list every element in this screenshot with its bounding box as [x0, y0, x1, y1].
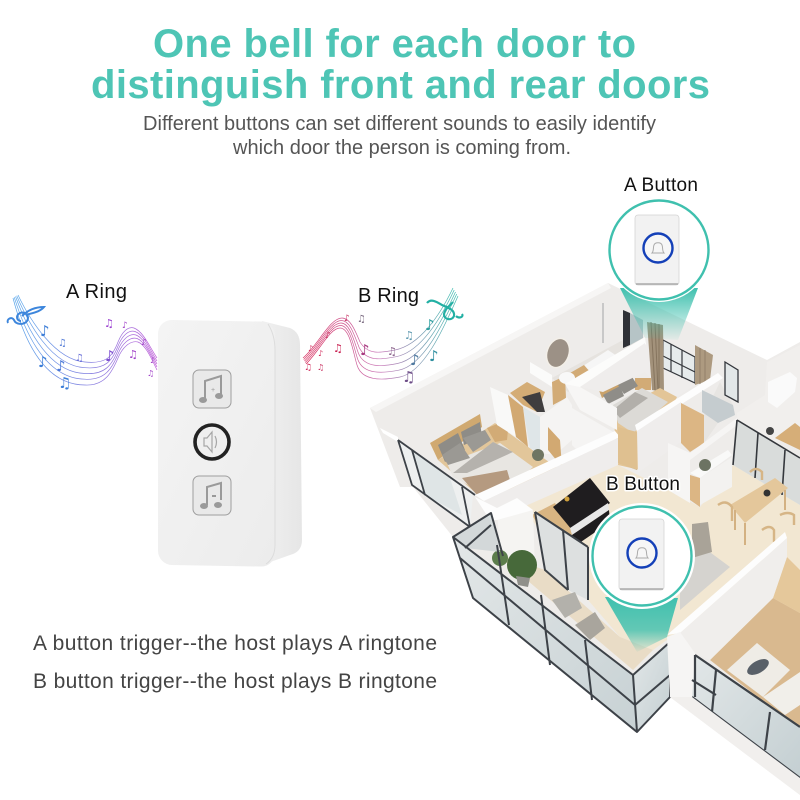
icon: volume up music button: + — [211, 387, 215, 394]
music wave: B Ring: ♪ — [429, 347, 439, 365]
icon: A doorbell button — [635, 215, 679, 285]
music wave: B Ring: ♫ — [333, 342, 343, 355]
music wave: B Ring: ♫ — [402, 368, 415, 386]
icon: B doorbell button — [619, 519, 664, 590]
music wave: B Ring: ♫ — [317, 363, 324, 372]
music wave: B Ring — [303, 285, 462, 386]
title: distinguish front and rear doors — [91, 63, 710, 107]
music wave: B Ring: ♪ — [344, 314, 350, 324]
music wave: B Ring: ♫ — [387, 345, 397, 358]
music wave: B Ring: ♪ — [318, 349, 323, 358]
connector beam: A Button — [620, 288, 698, 340]
title: One bell for each door to — [153, 22, 636, 66]
music wave: A Ring: ♫ — [147, 369, 154, 378]
title — [91, 22, 710, 107]
music wave: A Ring — [8, 281, 157, 392]
legend text: A button trigger--the host plays A ringtone — [33, 632, 437, 655]
dining table — [692, 469, 794, 558]
music wave: B Ring: ♪ — [410, 351, 420, 369]
piano — [532, 478, 610, 546]
music wave: B Ring: ♪ — [425, 316, 435, 334]
floor plan illustration — [370, 283, 800, 795]
callout: A Button: A Button — [624, 175, 698, 196]
icon: volume up music button — [193, 370, 231, 408]
music wave: B Ring: ♪ — [360, 341, 370, 359]
music wave: A Ring: ♫ — [58, 374, 71, 392]
music wave: A Ring: ♪ — [38, 353, 48, 371]
music wave: A Ring: ♪ — [40, 322, 50, 340]
music wave: A Ring: ♪ — [150, 356, 155, 365]
bedroom 1 — [430, 414, 560, 500]
icon: speaker button — [195, 425, 229, 459]
bedroom wall and closet — [635, 362, 768, 503]
left terrace railing — [380, 428, 475, 527]
music wave: B Ring: ♫ — [357, 314, 366, 325]
bathroom — [543, 303, 645, 405]
music wave: B Ring: ♪ — [308, 344, 313, 353]
music wave: A Ring: ♪ — [141, 338, 147, 348]
icon: treble clef teal — [427, 301, 462, 319]
icon: volume down music button — [193, 476, 231, 515]
music wave: A Ring: ♪ — [105, 347, 115, 365]
music wave: B Ring: ♪ — [325, 331, 331, 341]
callout: A Button — [607, 175, 711, 302]
music wave: A Ring: ♫ — [75, 353, 84, 364]
callout: B Button — [589, 474, 695, 609]
subtitle: Different buttons can set different sounds to easily identify — [143, 113, 656, 135]
subtitle: which door the person is coming from. — [232, 137, 571, 159]
legend text: B button trigger--the host plays B ringtone — [33, 670, 437, 693]
subtitle — [143, 113, 656, 159]
balcony — [453, 497, 670, 732]
connector beam: B Button — [605, 597, 678, 652]
icon: treble clef blue — [8, 307, 44, 324]
wardrobe and left interior walls — [475, 337, 646, 520]
music wave: A Ring: A Ring — [66, 281, 127, 303]
cabinet — [690, 450, 732, 507]
back window and curtains — [645, 322, 713, 397]
music wave: A Ring: ♫ — [128, 348, 138, 361]
music wave: A Ring: ♫ — [58, 338, 67, 349]
music wave: B Ring: ♫ — [304, 363, 312, 373]
bedroom 2 — [598, 370, 677, 470]
music wave: A Ring: ♫ — [104, 317, 114, 330]
callout: B Button: B Button — [606, 474, 680, 495]
music wave: B Ring: ♫ — [404, 329, 414, 342]
doorbell receiver — [158, 320, 302, 567]
lower right room wall — [667, 532, 800, 795]
music wave: A Ring: ♪ — [56, 357, 66, 375]
music wave: A Ring: ♪ — [122, 321, 128, 331]
music wave: B Ring: B Ring — [358, 285, 419, 307]
legend text — [33, 632, 437, 693]
kitchen — [733, 345, 800, 505]
